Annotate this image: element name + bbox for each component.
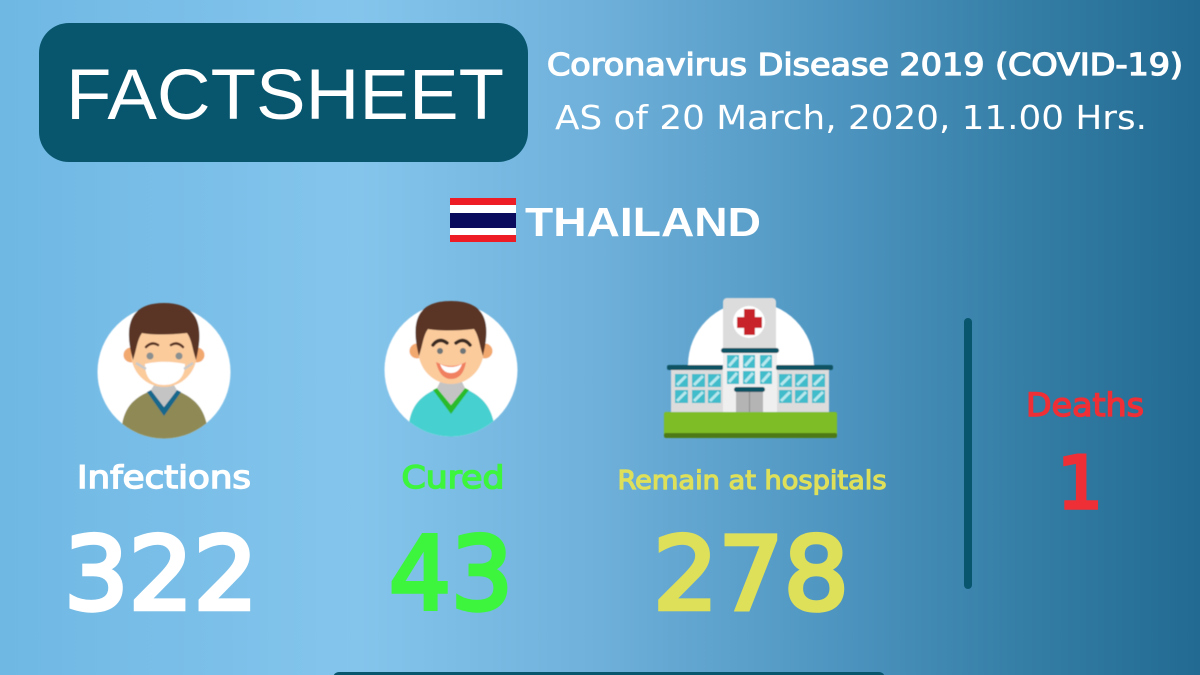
stat: remain at hospitals: Remain at hospitals	[618, 466, 886, 496]
stat: infections: Infections	[77, 460, 251, 496]
stat: deaths: 1	[1057, 441, 1103, 525]
title badge: FACTSHEET: FACTSHEET	[66, 56, 504, 135]
icon: hospital	[664, 298, 837, 438]
stat: cured	[389, 460, 513, 633]
stat: cured: 43	[389, 515, 513, 633]
heading: disease name: Coronavirus Disease 2019 (COVID-19)	[547, 48, 1183, 83]
stat: remain at hospitals: 278	[653, 515, 849, 633]
stat: remain at hospitals	[618, 466, 886, 633]
stat: deaths	[1026, 386, 1144, 525]
title badge: FACTSHEET	[39, 23, 528, 162]
stat: cured: Cured	[402, 460, 504, 496]
icon: Thai flag	[450, 198, 516, 242]
divider bar	[964, 318, 972, 589]
stat: deaths: Deaths	[1026, 386, 1144, 424]
date line: AS of 20 March, 2020, 11.00 Hrs.	[555, 98, 1147, 137]
icon: smiling man	[384, 301, 518, 440]
stat: infections	[64, 460, 258, 633]
stat: infections: 322	[64, 515, 258, 633]
icon: man with mask	[98, 303, 230, 442]
bottom panel edge	[333, 672, 885, 675]
country label: THAILAND	[525, 199, 761, 245]
